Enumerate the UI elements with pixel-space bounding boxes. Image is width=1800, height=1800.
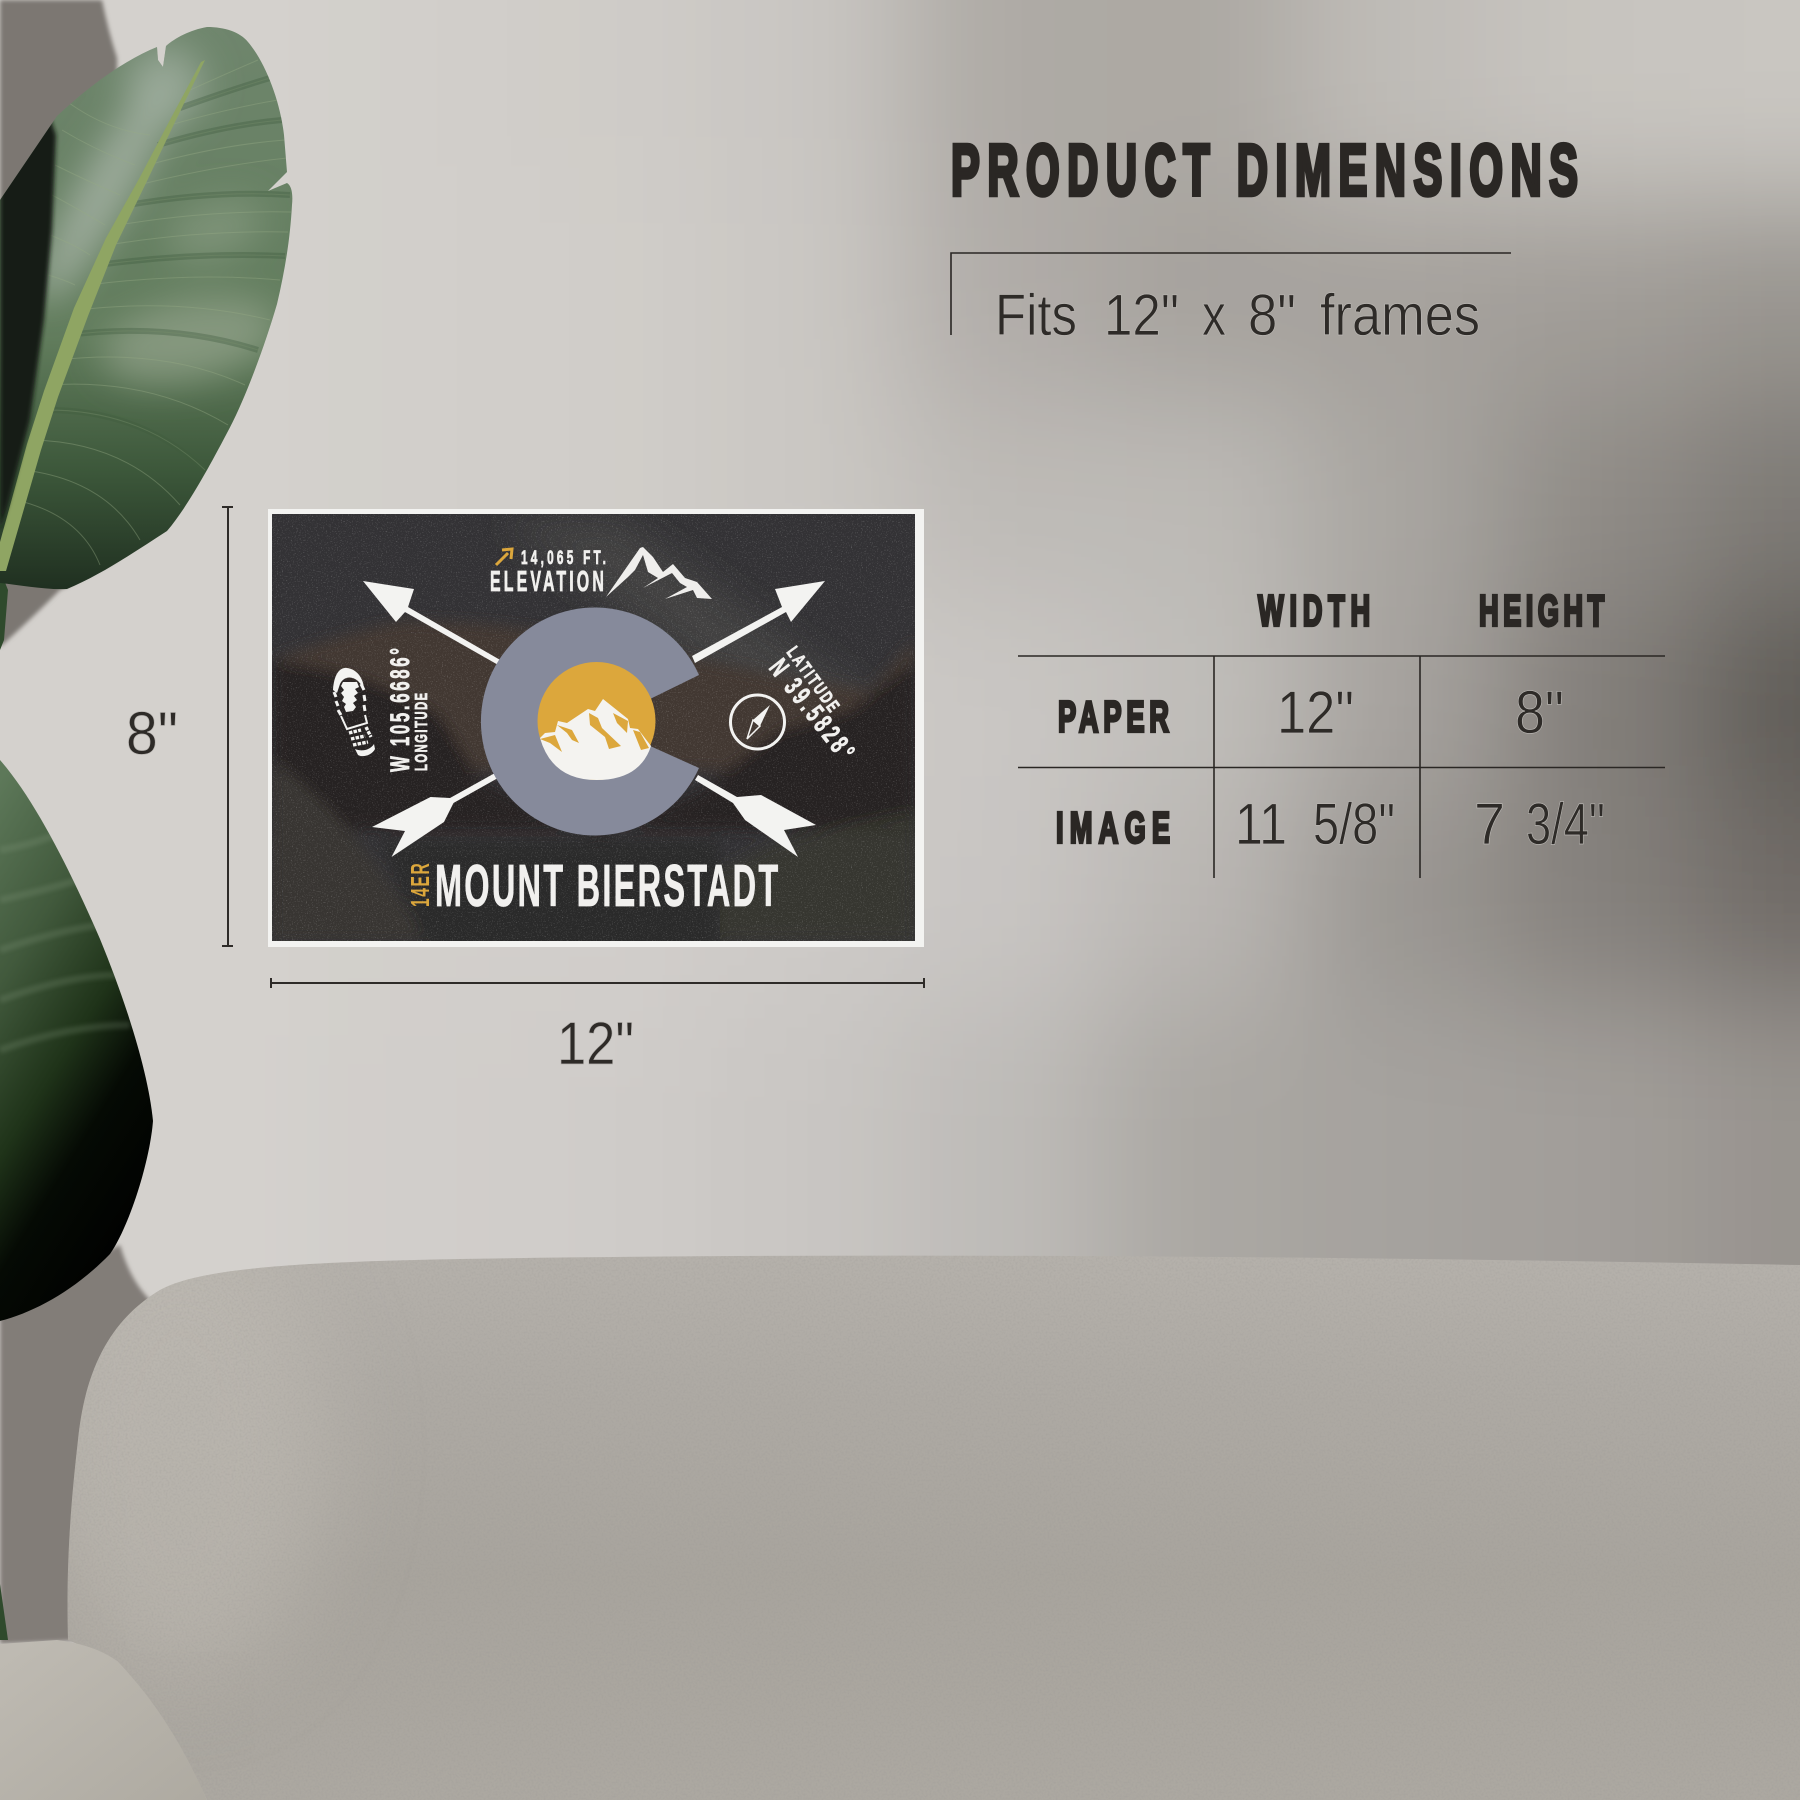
title: PRODUCT DIMENSIONS [951,130,1578,211]
frame note [951,253,1511,348]
mountain name: MOUNT BIERSTADT [435,854,778,920]
leaf veins [16,60,291,565]
column heading: height: HEIGHT [1479,586,1604,635]
silver sheen on leaf [46,37,276,399]
paper height value: 8" [1515,679,1564,746]
column heading: width: WIDTH [1258,586,1370,635]
longitude label: W 105.6686° [385,648,415,772]
gold arrow [496,549,512,565]
frame note: 12" [1104,283,1179,348]
frame note: Fits [995,283,1077,348]
elevation label [490,548,606,597]
upper plant leaf [0,20,300,600]
Colorado C emblem [481,608,699,835]
row heading: paper: PAPER [1058,692,1169,741]
leaf shadow on wall, upper [0,0,117,647]
sofa back [0,1220,1800,1800]
white snow peak [540,699,651,780]
icon: boot sole [333,668,375,756]
row heading: image: IMAGE [1056,803,1170,852]
frame note: x [1202,283,1226,348]
dimensions table [1018,586,1665,878]
width dimension line [271,978,924,988]
height dimension line [222,507,233,946]
C letter [481,608,699,835]
gold sun [538,662,656,780]
longitude label: LONGITUDE [411,693,432,771]
longitude label [385,648,432,772]
latitude label: N 39.5828° [763,653,861,766]
sofa cushion [0,1640,207,1800]
leaf midrib [0,60,205,571]
latitude label: LATITUDE [782,643,843,716]
lower plant leaf [0,755,160,1325]
image height value [1474,792,1605,857]
arrow: top right [692,581,825,663]
plant stem [0,570,8,1640]
leaf shadow on wall, lower [0,1245,150,1644]
frame note: 8" [1248,283,1296,348]
image width value: 11 [1235,792,1287,857]
poster photo background [272,514,915,960]
image width value [1235,792,1395,857]
width dimension label: 12" [557,1010,634,1077]
arrow: bottom right [695,775,816,857]
shaded rear leaf [0,112,56,530]
peak shadows [540,713,649,752]
elevation label: 14,065 FT. [521,548,606,569]
image width value: 5/8" [1313,792,1395,857]
image height value: 3/4" [1526,792,1605,857]
paper width value: 12" [1277,679,1354,746]
icon: mountain outline [606,547,712,599]
arrow: bottom left [372,773,498,857]
frame note: frames [1320,283,1480,348]
table grid [1018,656,1665,878]
poster paper [268,509,924,947]
elevation label: ELEVATION [490,565,604,597]
poster [268,509,924,960]
arrow: top left [363,581,502,666]
14ER label: 14ER [406,863,435,907]
image height value: 7 [1474,792,1505,857]
height dimension label: 8" [126,700,178,767]
leaf bands [40,78,290,470]
icon: compass [730,695,784,749]
